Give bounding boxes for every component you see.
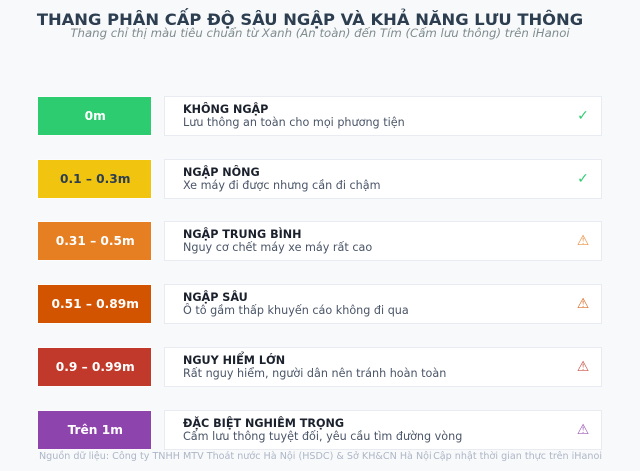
row: đặc biệt nghiêm trọng — [38, 410, 602, 450]
depth badge: 0.31 – 0.5m: 0.31 – 0.5m — [56, 234, 135, 248]
footer: source: Nguồn dữ liệu: Công ty TNHH MTV Thoát nước Hà Nội (HSDC) & Sở KH&CN Hà Nội — [39, 451, 432, 462]
card: ngập trung bình — [164, 221, 602, 261]
level name: NGẬP TRUNG BÌNH — [183, 228, 302, 241]
level description: Cấm lưu thông tuyệt đối, yêu cầu tìm đường vòng — [183, 430, 462, 443]
row: không ngập — [38, 96, 602, 136]
row: ngập sâu — [38, 284, 602, 324]
level description: Rất nguy hiểm, người dân nên tránh hoàn toàn — [183, 367, 446, 380]
row: ngập trung bình — [38, 221, 602, 261]
depth badge: 0.51 – 0.89m: 0.51 – 0.89m — [52, 297, 139, 311]
icon: check: ✓ — [577, 108, 589, 124]
level description: Xe máy đi được nhưng cần đi chậm — [183, 179, 380, 192]
depth badge: 0.51 – 0.89m — [38, 285, 151, 323]
level name: ĐẶC BIỆT NGHIÊM TRỌNG — [183, 417, 344, 430]
footer: update note: Cập nhật thời gian thực trên iHanoi — [433, 451, 602, 462]
level description: Lưu thông an toàn cho mọi phương tiện — [183, 116, 405, 129]
depth badge: 0.9 – 0.99m: 0.9 – 0.99m — [56, 360, 135, 374]
level description: Nguy cơ chết máy xe máy rất cao — [183, 241, 372, 254]
depth badge: 0.1 – 0.3m: 0.1 – 0.3m — [60, 172, 130, 186]
row: nguy hiểm lớn — [38, 347, 602, 387]
card: ngập nông — [164, 159, 602, 199]
depth badge: 0.31 – 0.5m — [38, 222, 151, 260]
subtitle: Thang chỉ thị màu tiêu chuẩn từ Xanh (An toàn) đến Tím (Cấm lưu thông) trên iHanoi — [70, 26, 570, 40]
level name: NGẬP SÂU — [183, 291, 248, 304]
icon: warning: ⚠ — [577, 296, 589, 312]
card: nguy hiểm lớn — [164, 347, 602, 387]
level name: NGUY HIỂM LỚN — [183, 354, 285, 367]
level description: Ô tô gầm thấp khuyến cáo không đi qua — [183, 304, 409, 317]
depth badge: 0m — [38, 97, 151, 135]
depth badge: 0.9 – 0.99m — [38, 348, 151, 386]
icon: warning: ⚠ — [577, 232, 589, 248]
card: đặc biệt nghiêm trọng — [164, 410, 602, 450]
card: không ngập — [164, 96, 602, 136]
row: ngập nông — [38, 159, 602, 199]
depth badge: trên 1m — [38, 411, 151, 449]
card: ngập sâu — [164, 284, 602, 324]
title: THANG PHÂN CẤP ĐỘ SÂU NGẬP VÀ KHẢ NĂNG LƯU THÔNG — [37, 10, 583, 28]
level name: NGẬP NÔNG — [183, 166, 260, 179]
icon: warning: ⚠ — [577, 358, 589, 374]
depth badge: 0m: 0m — [85, 109, 106, 123]
depth badge: 0.1 – 0.3m — [38, 160, 151, 198]
icon: check: ✓ — [577, 170, 589, 186]
depth badge: trên 1m: Trên 1m — [68, 423, 123, 437]
level name: KHÔNG NGẬP — [183, 103, 268, 116]
icon: warning: ⚠ — [577, 422, 589, 438]
